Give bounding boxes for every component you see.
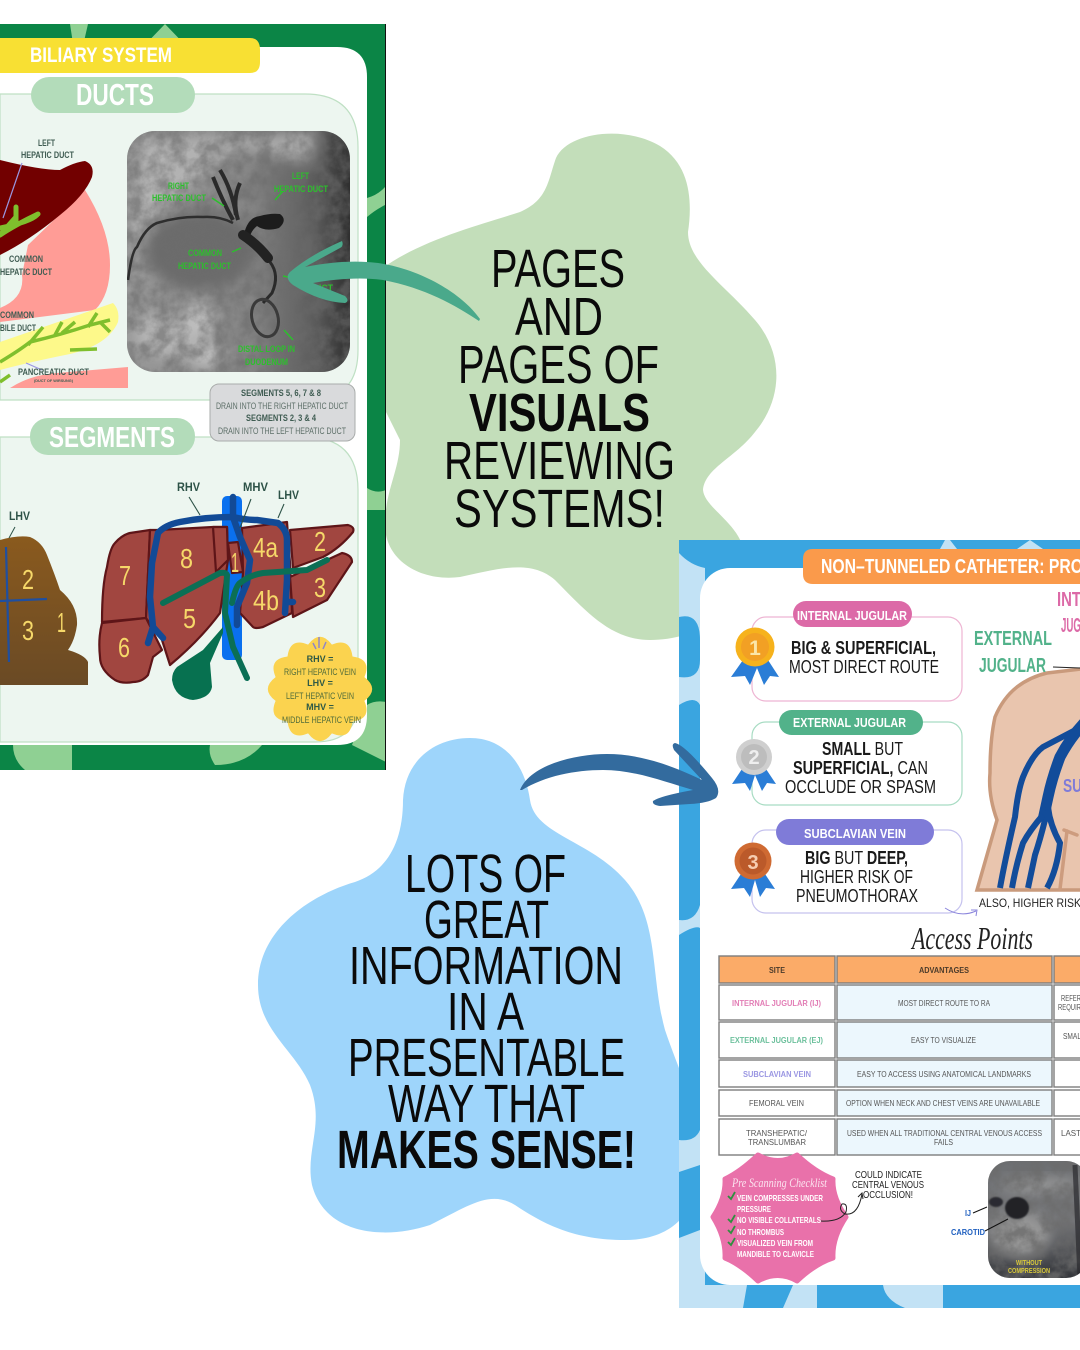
x-ray labels: DISTAL LOOP IN (238, 344, 295, 354)
x-ray image (127, 130, 350, 372)
panel: non-tunneled catheter poster (679, 540, 1080, 1308)
callout: segment drainage: SEGMENTS 5, 6, 7 & 8 (241, 388, 321, 398)
text: lots of great information: IN A (447, 982, 524, 1042)
note: venous occlusion: OCCLUSION! (863, 1189, 913, 1201)
ducts labels: BILE DUCT (0, 323, 36, 333)
liver segments diagram: 1 (231, 547, 239, 578)
icon: silver medal: 2 (748, 747, 760, 769)
ultrasound image: WITHOUT (1016, 1260, 1043, 1267)
text: lots of great information: MAKES SENSE! (337, 1120, 636, 1180)
card: external jugular: SMALL BUT (822, 739, 903, 759)
card: internal jugular: INTERNAL JUGULAR (797, 608, 908, 623)
x-ray labels: LEFT (292, 171, 309, 181)
badge: pre-scanning checklist: VISUALIZED VEIN FROM (737, 1238, 813, 1248)
arrow: small purple (945, 908, 977, 916)
text: pages and pages of visuals: SYSTEMS! (454, 479, 665, 539)
callout: segment drainage: SEGMENTS 2, 3 & 4 (246, 413, 316, 423)
x-ray labels: HEPATIC DUCT (178, 261, 231, 271)
ultrasound image: COMPRESSION (1008, 1268, 1050, 1275)
liver segments diagram: RHV (177, 482, 200, 494)
ducts labels: LEFT (38, 138, 55, 148)
card: external jugular: SUPERFICIAL, CAN (793, 758, 928, 778)
note: venous occlusion (852, 1171, 924, 1198)
table: access sites: EASY TO ACCESS USING ANATOMICAL LANDMARKS (857, 1070, 1031, 1079)
badge: pre-scanning checklist: PRESSURE (737, 1204, 771, 1214)
x-ray labels: HEPATIC DUCT (274, 184, 328, 194)
badge: vein key: RIGHT HEPATIC VEIN (284, 667, 356, 677)
card: subclavian vein: PNEUMOTHORAX (796, 886, 918, 906)
ducts labels: COMMON (9, 254, 43, 264)
card: internal jugular (731, 601, 962, 701)
card: external jugular: OCCLUDE OR SPASM (785, 777, 936, 797)
ultrasound labels: IJ (965, 1209, 971, 1218)
card: internal jugular: MOST DIRECT ROUTE (789, 657, 939, 677)
badge: pre-scanning checklist: NO VISIBLE COLLATERALS (737, 1215, 821, 1225)
badge: pre-scanning checklist (713, 1155, 846, 1281)
callout: segment drainage: DRAIN INTO THE RIGHT HEPATIC DUCT (216, 401, 348, 411)
badge: vein key: MHV = (306, 702, 334, 712)
badge: vein key: MIDDLE HEPATIC VEIN (282, 715, 361, 725)
table: access sites: TRANSHEPATIC/ (746, 1129, 808, 1138)
badge: pre-scanning checklist: Pre Scanning Checklist (731, 1175, 827, 1190)
title bar: biliary system: BILIARY SYSTEM (30, 44, 172, 67)
text: lots of great information: PRESENTABLE (348, 1028, 625, 1088)
badge: vein key: LHV = (307, 678, 333, 688)
callout: segment drainage (210, 384, 355, 441)
title bar: biliary system (0, 38, 260, 73)
icon: gold medal: 1 (749, 637, 761, 660)
text: lots of great information: INFORMATION (349, 936, 623, 996)
photo liver model: 1 (57, 607, 66, 638)
blue speech blob (258, 738, 700, 1240)
card: subclavian vein: HIGHER RISK OF (800, 867, 913, 887)
table: access sites: INTERNAL JUGULAR (IJ) (732, 999, 821, 1008)
text: pages and pages of visuals: PAGES (491, 239, 625, 299)
x-ray labels (152, 171, 333, 367)
arrow: blue to catheter poster (520, 743, 718, 806)
callout: segment drainage: DRAIN INTO THE LEFT HEPATIC DUCT (218, 426, 346, 436)
illustration: biliary anatomy (0, 138, 128, 388)
ultrasound labels (951, 1207, 1008, 1237)
card: internal jugular: BIG & SUPERFICIAL, (791, 638, 936, 658)
text: pages and pages of visuals: AND (515, 287, 603, 347)
arrow: loop to note (821, 1193, 863, 1221)
ducts labels: HEPATIC DUCT (21, 150, 74, 160)
liver segments diagram: 2 (314, 526, 326, 557)
ducts labels: PANCREATIC DUCT (18, 367, 89, 377)
card: external jugular: EXTERNAL JUGULAR (793, 715, 906, 730)
card: subclavian vein (731, 819, 962, 913)
icon: silver medal (732, 739, 776, 791)
table: access sites: SUBCLAVIAN VEIN (743, 1070, 811, 1079)
card: subclavian vein: BIG BUT DEEP, (805, 848, 908, 868)
table: access sites: ADVANTAGES (919, 965, 969, 975)
text: lots of great information: WAY THAT (388, 1074, 585, 1134)
liver segments diagram: 7 (119, 560, 131, 591)
icon: bronze medal: 3 (747, 852, 759, 874)
table: access sites: TRANSLUMBAR (748, 1138, 806, 1147)
liver segments diagram: 8 (180, 543, 193, 574)
table: access sites: OPTION WHEN NECK AND CHEST VEINS ARE UNAVAILABLE (846, 1099, 1040, 1108)
text: pages and pages of visuals (444, 239, 675, 539)
badge: pre-scanning checklist: VEIN COMPRESSES UNDER (737, 1193, 823, 1203)
liver segments diagram: 6 (118, 632, 130, 663)
label: external jugular: EXTERNAL (974, 628, 1052, 650)
photo liver model: LHV (9, 511, 30, 523)
text: pages and pages of visuals: PAGES OF (458, 335, 659, 395)
note: venous occlusion: COULD INDICATE (855, 1169, 922, 1181)
x-ray labels: DUODENUM (245, 357, 288, 367)
liver segments diagram: 4a (253, 532, 278, 563)
table: access sites: EXTERNAL JUGULAR (EJ) (730, 1036, 823, 1045)
table: access sites: FAILS (934, 1138, 953, 1147)
badge: pre-scanning checklist: MANDIBLE TO CLAVICLE (737, 1249, 814, 1259)
label: internal jugular (1058, 592, 1080, 632)
table: access sites: MOST DIRECT ROUTE TO RA (898, 999, 991, 1008)
liver segments diagram: 5 (183, 603, 196, 634)
label: external jugular: JUGULAR (979, 655, 1046, 677)
table: access sites: SITE (769, 965, 785, 975)
note: venous occlusion: CENTRAL VENOUS (852, 1179, 924, 1191)
panel: segments (0, 437, 358, 742)
card: external jugular (732, 710, 962, 805)
liver segments diagram: MHV (243, 482, 268, 494)
heading: ducts: DUCTS (76, 77, 154, 112)
text: pages and pages of visuals: VISUALS (469, 383, 650, 443)
heading: segments: SEGMENTS (49, 422, 175, 454)
photo liver model: 3 (22, 615, 34, 646)
table: access sites: EASY TO VISUALIZE (911, 1036, 976, 1045)
liver segments diagram: LHV (278, 490, 299, 502)
green speech blob (380, 134, 776, 640)
text: lots of great information: LOTS OF (405, 844, 566, 904)
badge: vein key (268, 637, 372, 741)
ducts labels: HEPATIC DUCT (0, 267, 52, 277)
text: pages and pages of visuals: REVIEWING (444, 431, 675, 491)
x-ray labels: UCT (315, 283, 333, 293)
panel: biliary system poster (0, 24, 386, 770)
badge: pre-scanning checklist: NO THROMBUS (737, 1227, 784, 1237)
liver segments diagram: 4b (253, 585, 279, 616)
heading: ducts (31, 77, 195, 113)
table: access sites (719, 956, 1080, 1155)
ducts labels: COMMON (0, 310, 34, 320)
badge: vein key: LEFT HEPATIC VEIN (286, 691, 354, 701)
ducts labels (0, 138, 89, 383)
illustration: torso veins (977, 668, 1080, 890)
panel: ducts (0, 94, 358, 400)
x-ray labels: HEPATIC DUCT (152, 193, 206, 203)
badge: vein key: RHV = (307, 654, 333, 664)
photo liver model (0, 511, 88, 685)
liver segments diagram: 3 (314, 572, 326, 603)
label: external jugular (974, 631, 1080, 672)
x-ray labels: COMMON (188, 248, 222, 258)
arrow: teal to x-ray (288, 241, 480, 321)
x-ray labels: RIGHT (168, 181, 189, 191)
photo liver model: 2 (22, 564, 34, 595)
text: lots of great information (337, 844, 636, 1180)
text: lots of great information: GREAT (424, 890, 549, 950)
ultrasound image (988, 1161, 1080, 1278)
ducts labels: (DUCT OF WIRSUNG) (34, 378, 74, 383)
title bar: non-tunneled catheter (803, 549, 1080, 584)
card: subclavian vein: SUBCLAVIAN VEIN (804, 826, 906, 841)
icon: bronze medal (731, 842, 775, 897)
table: access sites: FEMORAL VEIN (749, 1099, 804, 1108)
ultrasound labels: CAROTID (951, 1228, 985, 1237)
liver segments diagram (99, 482, 353, 700)
table: access sites: USED WHEN ALL TRADITIONAL CENTRAL VENOUS ACCESS (847, 1129, 1042, 1138)
icon: gold medal (731, 628, 779, 685)
